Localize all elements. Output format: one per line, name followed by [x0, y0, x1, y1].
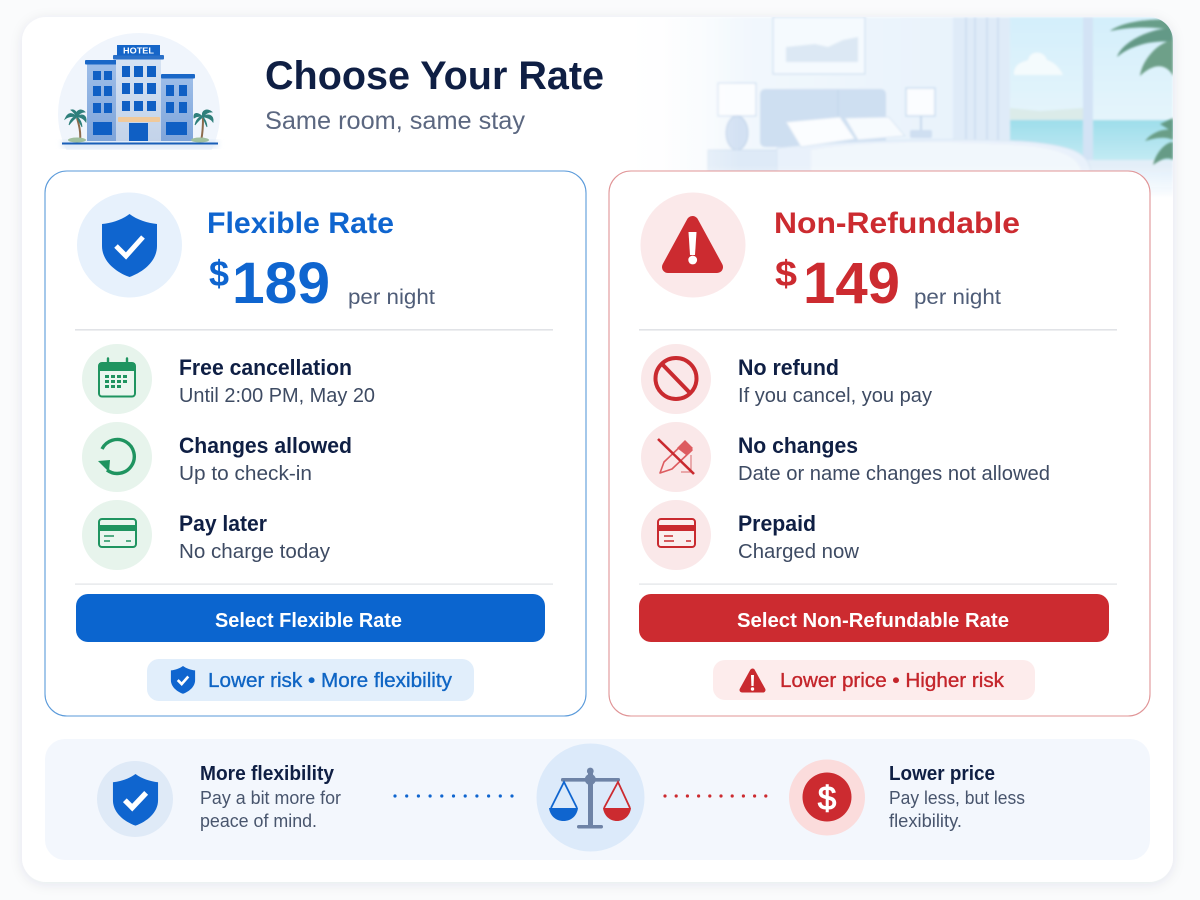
price: $189 per night — [209, 251, 435, 316]
text: lower price: Pay less, but less — [889, 788, 1025, 808]
icon: shield — [97, 761, 173, 837]
row: prepaid — [641, 500, 860, 570]
badge: lower price, higher risk — [713, 660, 1035, 700]
text: more flexibility — [200, 763, 341, 831]
text: lower price: flexibility. — [889, 811, 962, 831]
panel: non-refundable — [609, 171, 1150, 716]
text: more flexibility: peace of mind. — [200, 811, 317, 831]
price: $189 per night: 189 — [232, 251, 330, 316]
button: select flexible rate: Select Flexible Rate — [215, 610, 402, 632]
price: $149 per night: 149 — [803, 251, 900, 316]
badge: lower risk, more flexibility — [147, 659, 474, 701]
badge: lower risk, more flexibility: Lower risk • More flexibility — [208, 670, 452, 692]
badge: lower price, higher risk: Lower price • Higher risk — [780, 670, 1005, 692]
hotel illustration — [58, 33, 220, 150]
price: $149 per night: per night — [914, 286, 1001, 309]
row: pay later: Pay later — [179, 511, 267, 536]
row: changes allowed: Up to check-in — [179, 463, 312, 485]
icon: balance scale — [536, 744, 644, 852]
row: changes allowed: Changes allowed — [179, 433, 352, 458]
icon: dollar coin — [789, 760, 865, 836]
row: no changes — [641, 422, 1050, 492]
price: $189 per night: per night — [348, 286, 435, 309]
background illustration: hotel bedroom with sea view — [706, 17, 1173, 192]
row: free cancellation: Until 2:00 PM, May 20 — [179, 385, 375, 407]
icon: dollar coin: $ — [818, 780, 836, 816]
icon: shield with check — [77, 192, 182, 298]
hotel illustration: HOTEL — [123, 46, 154, 56]
button: select non-refundable rate — [639, 594, 1109, 642]
panel: summary comparison — [45, 739, 1150, 860]
dotted connector: blue — [393, 794, 514, 798]
button: select non-refundable rate: Select Non-Refundable Rate — [737, 610, 1009, 632]
text: more flexibility: More flexibility — [200, 763, 335, 785]
row: pay later — [82, 500, 330, 570]
row: prepaid: Charged now — [738, 541, 860, 563]
panel: flexible rate — [45, 171, 586, 716]
dotted connector: red — [663, 794, 767, 798]
price: $189 per night: $ — [209, 253, 229, 294]
row: no changes: No changes — [738, 433, 858, 458]
row: free cancellation: Free cancellation — [179, 355, 352, 380]
price: $149 per night: $ — [775, 253, 797, 294]
text: lower price: Lower price — [889, 763, 995, 785]
row: prepaid: Prepaid — [738, 511, 816, 536]
title: Choose Your Rate — [265, 54, 604, 98]
heading: non-refundable: Non-Refundable — [774, 207, 1020, 240]
row: no refund: No refund — [738, 355, 839, 380]
subtitle: Same room, same stay — [265, 107, 526, 135]
row: pay later: No charge today — [179, 541, 330, 563]
row: no refund — [641, 344, 932, 414]
row: no changes: Date or name changes not allowed — [738, 463, 1050, 485]
palm fronds — [1110, 19, 1173, 165]
price: $149 per night — [775, 251, 1001, 316]
row: changes allowed — [82, 422, 352, 492]
icon: warning triangle — [640, 192, 746, 298]
row: free cancellation — [82, 344, 375, 414]
button: select flexible rate — [76, 594, 545, 642]
row: no refund: If you cancel, you pay — [738, 385, 932, 407]
text: lower price — [889, 763, 1025, 831]
heading: flexible rate: Flexible Rate — [207, 207, 394, 240]
text: more flexibility: Pay a bit more for — [200, 788, 341, 808]
